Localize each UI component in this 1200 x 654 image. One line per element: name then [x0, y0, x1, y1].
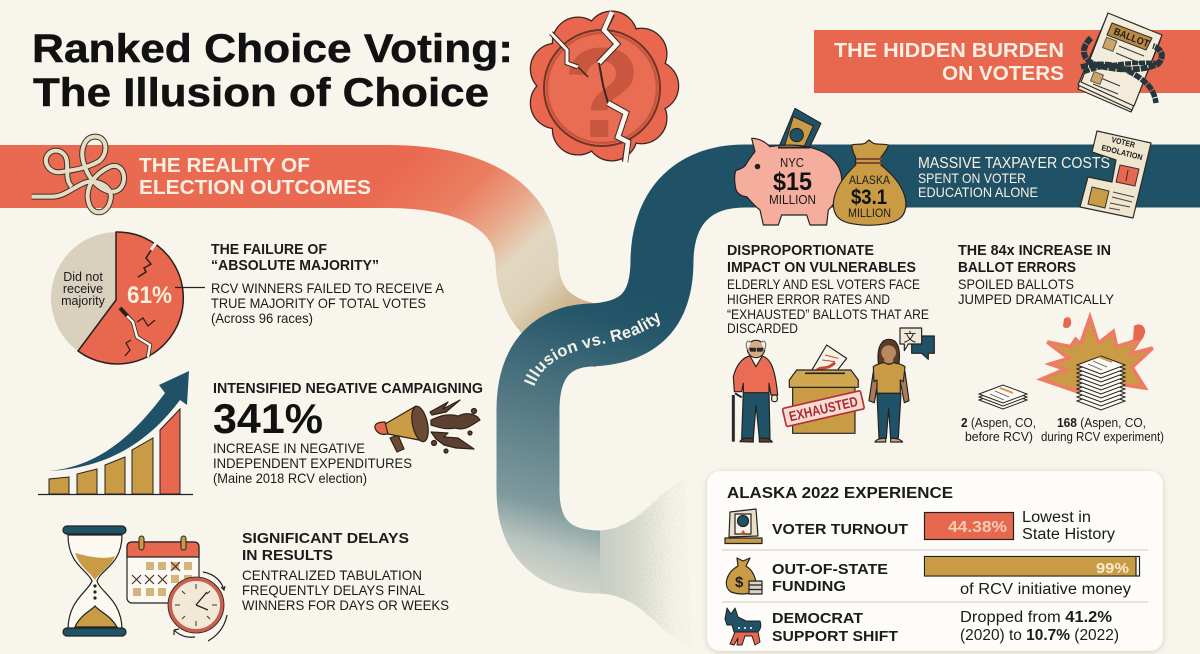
text block: impact on vulnerables [727, 242, 929, 336]
note: of RCV initiative money: of RCV initiative money [960, 581, 1131, 598]
icon: donkey [725, 608, 761, 645]
pie label: did not receive majority: Did not [63, 270, 103, 284]
title: Ranked Choice Voting: [32, 27, 513, 71]
icon: elderly voter with cane [733, 340, 778, 442]
text block: impact on vulnerables: DISCARDED [727, 320, 798, 336]
text block: delays in results: FREQUENTLY DELAYS FINAL [242, 582, 425, 598]
label: 168 ballots during RCV: 168 (Aspen, CO, [1057, 416, 1146, 430]
text block: ballot errors: JUMPED DRAMATICALLY [958, 291, 1115, 307]
text block: failure of absolute majority: TRUE MAJORITY OF TOTAL VOTES [211, 295, 426, 311]
text block: delays in results: IN RESULTS [242, 547, 333, 564]
icon: money bag Alaska 3.1 million: $3.1 [851, 186, 887, 209]
text block: ballot errors: BALLOT ERRORS [958, 259, 1076, 276]
icon: ballot box with exhausted stamp [782, 345, 864, 433]
label: 2 ballots before RCV: before RCV) [965, 430, 1033, 444]
text block: ballot errors: SPOILED BALLOTS [958, 276, 1074, 292]
note: dropped from 41.2 to 10.7 percent: Dropped from 41.2% [960, 609, 1112, 626]
dissolving ribbon end [596, 478, 692, 648]
icon: megaphone spraying mud [375, 400, 480, 453]
icon: voter education newspaper: VOTER [1111, 135, 1136, 150]
text block: failure of absolute majority: “ABSOLUTE MAJORITY” [211, 257, 379, 274]
row label: out-of-state funding: FUNDING [772, 578, 846, 595]
text block: negative campaigning: (Maine 2018 RCV election) [213, 470, 367, 486]
panel: Alaska 2022 experience [707, 471, 1163, 651]
text block: failure of absolute majority: THE FAILURE OF [211, 241, 327, 258]
text block: impact on vulnerables: IMPACT ON VULNERABLES [727, 259, 916, 276]
icon: hourglass [63, 526, 126, 636]
icon: calendar with crossed days [127, 536, 199, 603]
note: lowest in state history: State History [1022, 526, 1115, 543]
text block: impact on vulnerables: DISPROPORTIONATE [727, 242, 874, 259]
pie label: did not receive majority [61, 270, 106, 308]
path label: Illusion vs. Reality: Illusion vs. Reality [524, 312, 660, 386]
explosion with large ballot pile [1041, 317, 1153, 410]
icon: piggy bank NYC 15 million: $15 [773, 168, 812, 196]
bar chart with rising arrow [38, 371, 193, 494]
icon: voter education newspaper [1080, 131, 1151, 218]
label: 2 ballots before RCV: 2 (Aspen, CO, [961, 416, 1036, 430]
text block: massive taxpayer costs [918, 155, 1110, 200]
icon: money bag Alaska 3.1 million: MILLION [848, 208, 891, 220]
text block: failure of absolute majority: (Across 96 races) [211, 310, 313, 326]
panel heading: ALASKA 2022 EXPERIENCE [727, 485, 953, 502]
icon: piggy bank NYC 15 million: MILLION [769, 193, 816, 207]
icon: clock with arrows [168, 572, 227, 641]
text block: ballot errors: THE 84x INCREASE IN [958, 242, 1111, 259]
row label: out-of-state funding: OUT-OF-STATE [772, 561, 888, 578]
bar: 44.38 percent [924, 512, 1014, 540]
text block: impact on vulnerables: ELDERLY AND ESL VOTERS FACE [727, 276, 920, 292]
text block: delays in results: CENTRALIZED TABULATION [242, 567, 422, 583]
text block: failure of absolute majority: RCV WINNERS FAILED TO RECEIVE A [211, 280, 445, 296]
text block: negative campaigning: 341% [213, 395, 323, 442]
header band: the hidden burden on voters: THE HIDDEN BURDEN [834, 39, 1064, 62]
text block: massive taxpayer costs: SPENT ON VOTER [918, 170, 1026, 186]
label: 168 ballots during RCV [1041, 416, 1164, 444]
text block: delays in results: WINNERS FOR DAYS OR WEEKS [242, 597, 449, 613]
bar: 99 percent: 99% [1096, 560, 1129, 577]
text block: failure of absolute majority [211, 241, 445, 326]
text block: impact on vulnerables: HIGHER ERROR RATES AND [727, 291, 890, 307]
note: dropped from 41.2 to 10.7 percent [960, 609, 1119, 644]
text block: delays in results: SIGNIFICANT DELAYS [242, 530, 409, 547]
note: dropped from 41.2 to 10.7 percent: (2020) to 10.7% (2022) [960, 627, 1119, 644]
icon: money bag and coins [726, 558, 762, 594]
row label: voter turnout: VOTER TURNOUT [772, 521, 908, 538]
icon: money bag Alaska 3.1 million [833, 140, 906, 225]
ballot pile: 168 [1077, 356, 1125, 410]
note: lowest in state history [1022, 509, 1115, 543]
small ballot pile: 2 [979, 385, 1027, 409]
pie label: did not receive majority: receive [63, 282, 103, 296]
leader line [175, 286, 205, 288]
exhausted stamp: EXHAUSTED [787, 393, 859, 424]
icon: piggy bank NYC 15 million [735, 138, 842, 225]
title: The Illusion of Choice [33, 71, 489, 115]
row label: democrat support shift: SUPPORT SHIFT [772, 628, 898, 645]
icon: voting booth [725, 509, 762, 544]
row label: out-of-state funding [772, 561, 888, 595]
text block: negative campaigning: INCREASE IN NEGATIVE [213, 440, 365, 456]
label: 2 ballots before RCV [961, 416, 1036, 444]
note: lowest in state history: Lowest in [1022, 509, 1091, 526]
row label: democrat support shift [772, 610, 898, 645]
icon: piggy bank NYC 15 million: NYC [780, 156, 804, 170]
header band: the hidden burden on voters [814, 30, 1200, 93]
icon: money bag Alaska 3.1 million: ALASKA [849, 175, 890, 187]
text block: delays in results [242, 530, 449, 613]
text block: negative campaigning [213, 380, 483, 486]
icon: cracked wax seal with question mark [531, 12, 678, 165]
text block: impact on vulnerables: “EXHAUSTED” BALLOTS THAT ARE [727, 306, 929, 322]
icon: money bag and coins: $ [735, 574, 744, 591]
bar: 44.38 percent: 44.38% [948, 519, 1007, 536]
ribbon: reality of election outcomes (coral path) [0, 176, 600, 336]
icon: ESL voter with translation bubbles [869, 328, 934, 442]
icon: cracked wax seal with question mark: ? [563, 22, 641, 165]
text block: massive taxpayer costs: MASSIVE TAXPAYER COSTS [918, 155, 1110, 172]
icon: voter education newspaper: EDOLATION [1101, 143, 1144, 162]
icon: ESL voter with translation bubbles: 文 [904, 330, 917, 344]
section heading band: reality of election outcomes: ELECTION OUTCOMES [139, 176, 371, 199]
pie value: 61% [127, 282, 172, 309]
icon: tangled knot [32, 137, 124, 212]
section heading band: reality of election outcomes [139, 154, 371, 199]
ribbon: hidden burden (teal path) [528, 176, 1200, 562]
text block: massive taxpayer costs: EDUCATION ALONE [918, 184, 1038, 200]
pie chart: 61 percent [51, 232, 183, 364]
bar: 99 percent [924, 556, 1140, 577]
icon: ballot wrapped in chains: BALLOT [1112, 27, 1150, 50]
text block: ballot errors [958, 242, 1115, 307]
header band: the hidden burden on voters: ON VOTERS [942, 62, 1064, 85]
row label: democrat support shift: DEMOCRAT [772, 610, 863, 627]
text block: negative campaigning: INDEPENDENT EXPENDITURES [213, 455, 412, 471]
title [32, 27, 513, 115]
label: 168 ballots during RCV: during RCV experiment) [1041, 430, 1164, 444]
icon: dollar bill entering piggy bank [778, 108, 821, 150]
section heading band: reality of election outcomes: THE REALITY OF [139, 154, 310, 177]
icon: ballot wrapped in chains [1078, 13, 1162, 112]
pie label: did not receive majority: majority [61, 294, 106, 308]
text block: negative campaigning: INTENSIFIED NEGATIVE CAMPAIGNING [213, 380, 483, 397]
